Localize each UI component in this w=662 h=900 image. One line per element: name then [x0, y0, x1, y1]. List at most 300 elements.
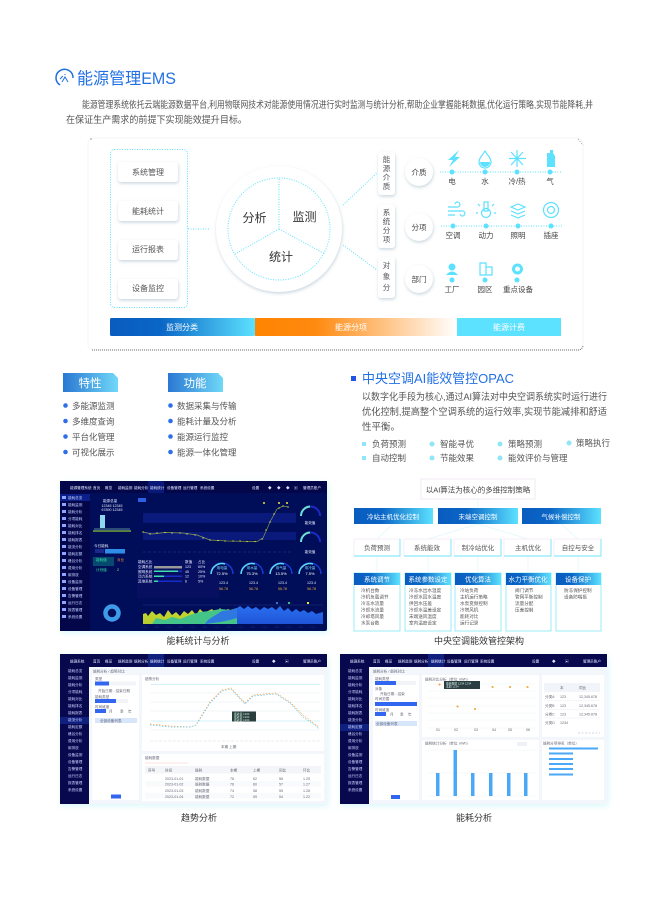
energy media row: 冷/热 — [508, 176, 526, 186]
screenshot: trend analysis: 能耗分析 / 趋势对比 — [93, 668, 125, 674]
trend sidebar: 碳排放 — [68, 745, 79, 750]
caption: OPAC diagram: 中央空调能效管控架构 — [434, 635, 524, 646]
trend data table: 能耗数据 — [145, 755, 160, 760]
trend nav bar: 概览 — [105, 658, 113, 664]
comparison sidebar: 能耗报表 — [348, 710, 363, 715]
dashboard progress table: 45 — [185, 570, 189, 574]
trend data table: 2023-01-03 — [165, 789, 183, 793]
trend sidebar: 能耗对比 — [68, 696, 83, 701]
flow detail cards: 主机运行策略 — [460, 594, 488, 600]
flow detail cards: 流量分配 — [515, 600, 534, 607]
caption: energy dashboard: 能耗统计与分析 — [166, 635, 230, 646]
functions bullets: 能源运行监控 — [177, 432, 229, 442]
comparison scatter chart: 能耗对比分析（单位: kWh） — [425, 676, 470, 682]
left system list: 能耗统计 — [132, 206, 164, 216]
energy media row: 电 — [448, 176, 456, 186]
comparison scatter chart: 03 — [474, 728, 478, 732]
comparison sidebar: 能耗分析 — [348, 682, 363, 687]
trend data table: 序号 — [148, 768, 156, 772]
dashboard four gauges: 56.78 — [249, 587, 258, 591]
OPAC heading: 中央空调AI能效管控OPAC — [362, 371, 514, 386]
dashboard four gauges: 123.4 — [249, 581, 258, 585]
flow detail cards: 冷冻水出水温度 — [409, 587, 442, 594]
dashboard nav bar: 能源管理系统 — [70, 485, 92, 490]
flow blue bars: 气候补偿控制 — [542, 512, 581, 521]
comparison nav bar: 设置 — [532, 658, 540, 664]
flow detail cards: 冷机台数 — [361, 587, 380, 594]
trend data table: 本期 — [230, 768, 238, 772]
panel: OPAC intro — [351, 371, 611, 463]
dashboard progress table: 10% — [198, 574, 206, 578]
energy media row — [440, 150, 562, 186]
comparison filter panel: 年 — [408, 712, 412, 716]
trend sidebar: 设备管理 — [68, 759, 83, 764]
trend sidebar: 分项能耗 — [68, 689, 83, 694]
comparison nav bar: 能耗统计 — [431, 658, 446, 664]
trend nav bar: 设备管理 — [167, 658, 182, 664]
system items row: 插座 — [544, 230, 559, 240]
trend data table: 76 — [230, 782, 234, 786]
flow top box: 以AI算法为核心的多维控制策略 — [426, 484, 531, 494]
dashboard nav bar: 能耗分析 — [134, 485, 149, 490]
trend data table: 同比 — [279, 768, 287, 772]
trend nav bar: ▣ — [285, 660, 289, 664]
dashboard progress table: 5% — [198, 580, 204, 584]
dashboard four gauges: 用水量 — [247, 565, 258, 570]
dashboard sidebar: 能耗定额 — [68, 551, 83, 556]
OPAC feature tags: 策略预测 — [508, 439, 542, 449]
trend filter panel: 月 — [109, 708, 113, 714]
dashboard sidebar: 设备监测 — [68, 579, 83, 584]
dashboard sidebar: 能耗监测 — [68, 502, 83, 507]
dashboard sidebar: 能耗对比 — [68, 523, 83, 528]
dashboard four gauges: 56.78 — [219, 587, 228, 591]
flow detail cards: 供回水压差 — [409, 600, 432, 607]
comparison nav bar: 设备管理 — [447, 658, 462, 664]
comparison filter panel: 全部设备列表 — [376, 721, 398, 726]
trend sidebar: 系统设置 — [68, 787, 83, 792]
dashboard left panel: 能耗值 — [96, 557, 107, 562]
flow detail cards: 水泵台数 — [361, 620, 380, 626]
dashboard progress table: 其他系统 — [138, 578, 153, 584]
screenshot: trend analysis — [60, 654, 327, 804]
vertical category labels: 象 — [383, 271, 391, 281]
dashboard four gauges: 13.5% — [275, 571, 287, 576]
comparison summary table: 分类B — [545, 703, 555, 708]
trend data table: 58 — [253, 789, 257, 793]
trend sidebar: 能耗总览 — [68, 668, 83, 673]
trend sidebar: 运行日志 — [68, 773, 83, 778]
energy media row: 水 — [481, 176, 489, 186]
trend data table: 环比 — [303, 768, 311, 772]
trend data table: 55 — [279, 789, 283, 793]
dashboard four gauges: 用冷量 — [305, 565, 316, 570]
dashboard nav bar: 设置 — [252, 485, 260, 490]
dashboard left panel: 67890 12345 — [102, 508, 122, 512]
dashboard nav bar: 能耗统计 — [150, 485, 165, 490]
dashboard left panel: 2 — [117, 568, 119, 572]
comparison nav bar: 管理员账户 — [583, 658, 601, 664]
trend sidebar: 能耗定额 — [68, 724, 83, 729]
dashboard progress table: 123 — [185, 565, 191, 569]
trend filter panel: 开始日期 - 结束日期 — [98, 688, 130, 693]
dashboard progress table: 数值 — [185, 559, 193, 564]
trend data table: 60 — [253, 782, 257, 786]
flow white boxes: 主机优化 — [515, 543, 542, 552]
comparison nav bar: 系统设置 — [480, 658, 495, 664]
trend data table: 2023-01-04 — [165, 795, 183, 799]
dashboard donut — [106, 606, 118, 620]
flow detail cards: 优化算法 — [465, 574, 492, 584]
trend data table: 59 — [253, 795, 257, 799]
comparison sidebar: 能流分析 — [348, 717, 363, 722]
flow detail cards: 系统调节 — [364, 574, 390, 584]
pie: analysis, monitoring, statistics: 监测 — [292, 210, 317, 224]
flow detail cards: 室内温度设定 — [409, 620, 437, 626]
comparison scatter chart: 本期 1234 — [446, 684, 459, 688]
round category nodes: 部门 — [412, 274, 426, 284]
comparison sidebar: 分项能耗 — [348, 689, 363, 694]
flow white boxes: 负荷预测 — [364, 543, 390, 552]
trend sidebar: 告警管理 — [68, 766, 83, 771]
comparison filter panel: 季 — [400, 712, 404, 716]
features bullets — [63, 401, 115, 458]
dashboard nav bar: ▣ — [294, 486, 298, 490]
intro paragraph: 在保证生产需求的前提下实现能效提升目标。 — [66, 114, 247, 126]
dashboard left panel: 今日能耗 — [94, 543, 109, 548]
flow blue bars — [354, 508, 601, 524]
comparison filter panel: 对象 — [375, 686, 383, 691]
flow detail cards: 运行记录 — [460, 620, 479, 626]
comparison nav bar: ◆ — [552, 658, 556, 664]
trend data table: 57 — [279, 782, 283, 786]
flow detail cards: 冷却塔风量 — [361, 613, 384, 620]
comparison nav bar: 运行管理 — [464, 658, 479, 664]
comparison filter panel: 时间范围 — [375, 696, 390, 701]
comparison sidebar: 设备管理 — [348, 759, 363, 764]
trend nav bar — [60, 654, 327, 667]
comparison sidebar: 能耗总览 — [348, 668, 363, 673]
trend data table: 2023-01-02 — [165, 782, 183, 786]
flow detail cards: 水泵变频控制 — [460, 600, 488, 607]
comparison sidebar: 能耗排名 — [348, 703, 363, 708]
dashboard nav bar: ◆ — [286, 485, 290, 490]
left system list: 系统管理 — [132, 167, 164, 177]
dashboard four gauges: 123.4 — [307, 581, 316, 585]
trend nav bar: 能耗统计 — [150, 658, 165, 664]
comparison summary table: 12,345.678 — [579, 704, 597, 708]
dashboard left panel: 12345 12345 — [102, 504, 122, 508]
dashboard nav bar: 概览 — [105, 485, 113, 490]
system items row: 动力 — [478, 230, 494, 240]
dashboard nav bar: 首页 — [93, 485, 101, 490]
trend data table: 能耗数据 — [195, 776, 210, 781]
flow detail cards: 管网平衡控制 — [515, 594, 543, 600]
OPAC paragraph: 性平衡。 — [362, 421, 400, 433]
comparison summary table: 123 — [560, 695, 566, 699]
icon: energy badge — [56, 69, 73, 85]
trend data table: 56 — [279, 777, 283, 781]
dashboard left panel — [93, 498, 131, 572]
flow detail cards: 末端送风温度 — [409, 613, 437, 620]
trend nav bar: 运行管理 — [183, 658, 198, 664]
caption: comparison analysis: 能耗分析 — [456, 812, 492, 823]
OPAC feature tags: 策略执行 — [576, 438, 611, 448]
trend sidebar: 报表管理 — [68, 780, 83, 785]
comparison bar chart — [422, 740, 539, 800]
flow blue bars: 冷站主机优化控制 — [367, 512, 420, 521]
comparison sidebar: 能耗监测 — [348, 675, 363, 680]
dashboard progress table: 占比 — [198, 559, 206, 564]
dashboard progress table: 60% — [198, 565, 206, 569]
dashboard nav bar: 管理员账户 — [303, 485, 321, 490]
screenshot: comparison analysis — [340, 654, 607, 804]
trend data table: 能耗数据 — [195, 794, 210, 799]
comparison sidebar — [340, 667, 369, 804]
trend sidebar: 峰谷分析 — [68, 731, 83, 736]
caption: trend analysis: 趋势分析 — [181, 812, 217, 823]
flow detail cards: 设备保护 — [565, 574, 591, 584]
trend filter panel: 类型 — [95, 676, 103, 681]
flow detail cards: 能耗对比 — [460, 613, 479, 620]
trend nav bar: 设置 — [252, 658, 260, 664]
flow detail cards: 冷机负载调节 — [361, 594, 389, 600]
comparison summary table: 本 — [560, 685, 564, 690]
trend data table: 74 — [230, 789, 234, 793]
flow detail cards: 冷站负荷 — [460, 587, 479, 594]
flow detail cards: 冷却水温差设定 — [409, 606, 442, 614]
flow detail cards: 防冻保护控制 — [564, 587, 592, 594]
comparison horizontal bars — [542, 740, 604, 800]
dashboard sidebar: 费用分析 — [68, 565, 83, 570]
comparison summary table: 12,345.678 — [579, 712, 597, 716]
trend data table: 2023-01-01 — [165, 777, 183, 781]
process bars: 监测分类 — [166, 322, 198, 332]
flow white boxes: 系统能效 — [414, 543, 440, 552]
system items row — [441, 202, 562, 240]
dashboard sidebar — [60, 493, 90, 631]
dashboard progress table: 照明系统 — [138, 569, 153, 574]
comparison nav bar: 能耗分析 — [414, 658, 429, 664]
dashboard left panel: 对比 — [117, 557, 125, 562]
trend line chart — [142, 675, 324, 751]
comparison filter panel — [373, 675, 419, 800]
trend line chart: 趋势分析 — [145, 676, 160, 681]
trend nav bar: 首页 — [93, 658, 101, 664]
comparison sidebar: 峰谷分析 — [348, 731, 363, 736]
left system list — [110, 150, 210, 308]
department items row — [444, 263, 533, 294]
flow detail cards — [354, 573, 601, 631]
comparison sidebar: 报表管理 — [348, 780, 363, 785]
comparison filter panel: 时间维度 — [375, 707, 390, 712]
comparison scatter chart — [422, 675, 539, 737]
trend data table — [142, 754, 324, 801]
trend data table: 能耗 — [195, 768, 203, 772]
trend nav bar: 能耗分析 — [134, 658, 149, 664]
trend data table: 1.27 — [303, 782, 310, 786]
functions bullets — [168, 401, 237, 458]
features bullets: 平台化管理 — [72, 432, 115, 442]
dashboard nav bar: ◆ — [268, 485, 272, 490]
dashboard sidebar: 分项能耗 — [68, 516, 83, 521]
left system list: 设备监控 — [132, 283, 164, 293]
dashboard sidebar: 能耗排名 — [68, 530, 83, 535]
panel: strategy flow diagram — [354, 479, 601, 631]
dashboard progress table: 空调系统 — [138, 564, 153, 569]
trend data table: 54 — [279, 795, 283, 799]
panel: features list — [63, 373, 118, 458]
vertical category labels: 源 — [383, 164, 391, 173]
dashboard progress table: 6 — [185, 580, 187, 584]
comparison sidebar: 费用分析 — [348, 738, 363, 743]
dashboard sidebar: 峰谷分析 — [68, 558, 83, 563]
trend sidebar: 能耗报表 — [68, 710, 83, 715]
dashboard sidebar: 告警管理 — [68, 593, 83, 598]
dashboard sidebar: 能流分析 — [68, 544, 83, 549]
section title: 能源管理EMS — [77, 69, 176, 88]
round category nodes: 分项 — [412, 223, 427, 232]
dashboard progress table: 25% — [198, 570, 206, 574]
dashboard sidebar: 系统设置 — [68, 614, 83, 619]
trend line chart: 本期 上期 — [221, 744, 237, 749]
dashboard progress table: 能耗占比 — [138, 559, 153, 564]
heading badge: functions: 功能 — [184, 376, 207, 390]
comparison summary table: 1234 — [560, 721, 568, 725]
comparison nav bar: 首页 — [373, 658, 381, 664]
comparison summary table: 123 — [560, 712, 566, 716]
comparison filter panel: 开始日期 - 结束 — [380, 691, 405, 696]
process bars: 能源分项 — [335, 322, 367, 332]
comparison filter panel: 月 — [390, 712, 394, 716]
dashboard four gauges: 7.5% — [305, 571, 315, 576]
system items row: 照明 — [510, 231, 526, 240]
trend filter panel: 全部设备列表 — [100, 718, 122, 723]
trend data table: 78 — [230, 777, 234, 781]
trend nav bar: 管理员账户 — [303, 658, 321, 664]
comparison scatter chart: 06 — [526, 728, 530, 732]
OPAC paragraph — [362, 391, 607, 433]
trend data table: 时间 — [165, 768, 173, 772]
dashboard right gauges: 能效值 — [305, 549, 316, 554]
flow white boxes: 制冷站优化 — [462, 543, 495, 552]
OPAC feature tags: 节能效果 — [440, 453, 475, 463]
comparison summary table: 同比 — [579, 685, 587, 690]
flow detail cards: 冷却水回水温度 — [409, 594, 442, 600]
pie: analysis, monitoring, statistics: 分析 — [242, 211, 267, 225]
department items row: 园区 — [478, 285, 493, 294]
features bullets: 多维度查询 — [72, 416, 115, 426]
comparison scatter chart: 02 — [454, 728, 458, 732]
dashboard four gauges: 56.78 — [278, 587, 287, 591]
trend sidebar — [60, 667, 89, 804]
dashboard four gauges: 123.4 — [278, 581, 287, 585]
OPAC paragraph: 以数字化手段为核心,通过AI算法对中央空调系统实时运行进行 — [362, 391, 607, 403]
comparison summary table: 分类C — [545, 712, 555, 716]
trend data table: 1.28 — [303, 789, 310, 793]
process bars: 能源计费 — [493, 322, 525, 332]
comparison sidebar: 能耗定额 — [348, 724, 363, 729]
panel: EMS architecture diagram — [88, 138, 583, 350]
vertical category labels: 能 — [383, 154, 391, 164]
dashboard four gauges: 123.4 — [219, 581, 228, 585]
trend nav bar: 系统设置 — [200, 658, 215, 664]
comparison scatter chart: 能耗数据 1234 1234 — [446, 682, 472, 686]
trend data table: 上期 — [253, 768, 261, 772]
system items row: 空调 — [446, 230, 460, 240]
dashboard sidebar: 碳排放 — [68, 572, 79, 577]
comparison sidebar: 系统设置 — [348, 787, 363, 792]
vertical category labels: 质 — [383, 181, 391, 191]
comparison nav bar: 能耗监测 — [398, 658, 413, 664]
panel: functions list — [168, 373, 237, 458]
trend nav bar: 能源系统 — [70, 658, 85, 664]
vertical category labels: 项 — [383, 235, 391, 244]
dashboard right gauges — [301, 506, 320, 554]
OPAC feature tags: 智能寻优 — [440, 439, 475, 449]
flow detail cards: 冷却水流量 — [361, 606, 384, 614]
flow detail cards: 水力平衡优化 — [508, 574, 548, 584]
trend nav bar: 能耗监测 — [118, 658, 133, 664]
comparison sidebar: 碳排放 — [348, 745, 359, 750]
dashboard nav bar: 设备管理 — [167, 485, 182, 490]
trend line chart: 能耗值 1234 — [234, 712, 250, 716]
OPAC feature tags — [362, 438, 611, 463]
functions bullets: 数据采集与传输 — [177, 401, 237, 411]
trend data table: 1.25 — [303, 777, 310, 781]
trend data table: 62 — [253, 777, 257, 781]
flow white boxes: 自控与安全 — [562, 543, 595, 552]
comparison sidebar: 能耗对比 — [348, 696, 363, 701]
trend filter panel: 能耗类型 — [95, 694, 110, 699]
energy media row: 气 — [546, 176, 554, 186]
features bullets: 多能源监测 — [72, 401, 115, 411]
dashboard right gauges: 能效值 — [305, 520, 316, 525]
pie: analysis, monitoring, statistics: 统计 — [269, 250, 293, 264]
flow detail cards: 设备防喘振 — [564, 594, 587, 600]
dashboard four gauges: 56.78 — [307, 587, 316, 591]
flow detail cards: 冷塔风机 — [460, 606, 479, 614]
left system list: 运行报表 — [132, 244, 164, 254]
trend line chart: 能耗值 1234 — [234, 715, 250, 719]
comparison nav bar — [340, 654, 607, 667]
dashboard nav bar — [60, 481, 327, 493]
trend sidebar: 能耗监测 — [68, 675, 83, 680]
process bars — [110, 318, 561, 336]
dashboard nav bar: 运行管理 — [183, 485, 198, 490]
trend sidebar: 设备监测 — [68, 752, 83, 757]
comparison sidebar: 运行日志 — [348, 773, 363, 778]
department items row: 工厂 — [444, 285, 460, 294]
trend filter panel — [92, 675, 139, 800]
dashboard four gauges: 用气量 — [276, 565, 287, 570]
features bullets: 可视化展示 — [72, 448, 115, 458]
comparison sidebar: 设备监测 — [348, 752, 363, 757]
comparison horizontal bars: 能耗分项排名（单位） — [543, 740, 579, 746]
dashboard left panel: 能源总量 — [103, 498, 118, 503]
screenshot: energy dashboard dark — [60, 481, 327, 631]
dashboard progress table: 动力系统 — [138, 574, 153, 578]
dashboard four gauges — [211, 563, 321, 591]
vertical category labels: 统 — [383, 216, 391, 226]
flow detail cards: 系统参数设定 — [408, 574, 448, 584]
comparison filter panel: 能耗类型 — [375, 676, 390, 681]
heading badge: features: 特性 — [78, 376, 102, 390]
flow white boxes — [354, 539, 601, 556]
trend line chart: 能耗值 1234 — [234, 718, 250, 722]
comparison summary table: 分类A — [545, 694, 555, 699]
trend data table: 能耗数据 — [195, 782, 210, 786]
